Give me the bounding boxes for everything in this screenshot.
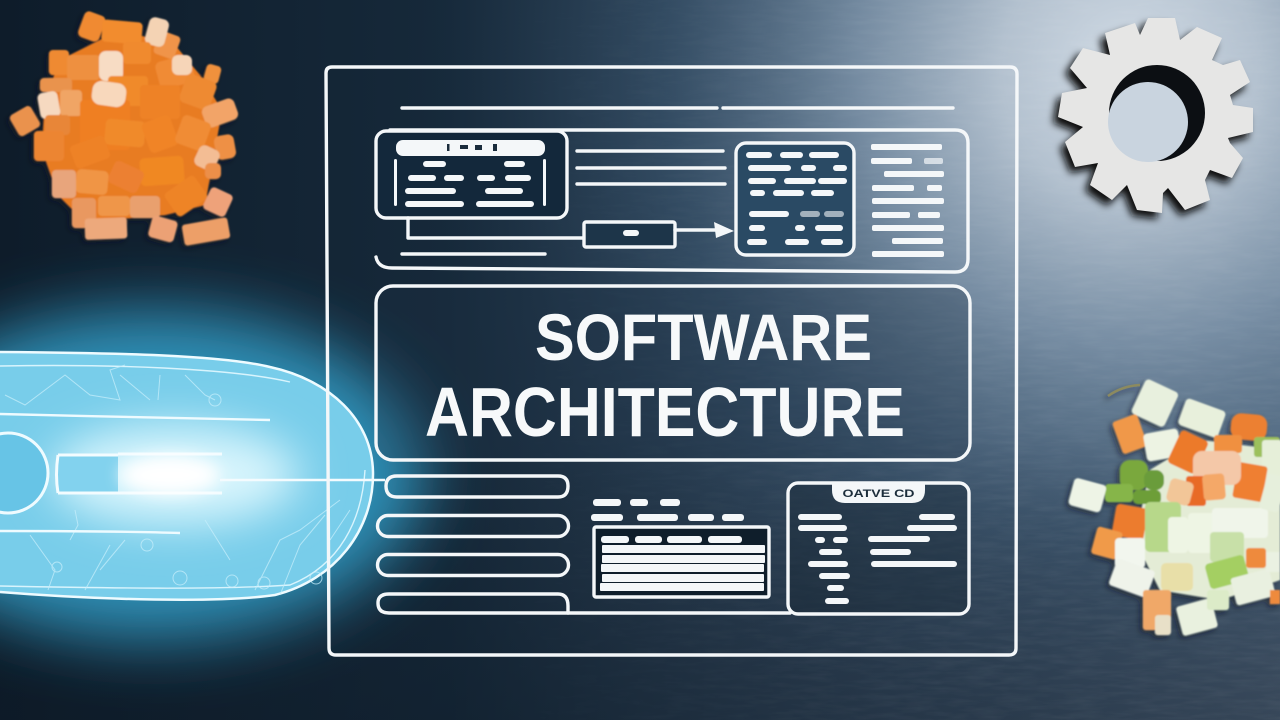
connector from mouse to list <box>220 479 385 481</box>
panel: title box <box>376 286 970 460</box>
panel: top diagram <box>376 130 968 272</box>
title line two: ARCHITECTURE <box>425 373 905 451</box>
connector with box and arrow <box>408 218 734 247</box>
sub-panel: data table <box>736 143 854 255</box>
panel: output box <box>788 483 969 614</box>
outer frame <box>326 67 1017 655</box>
header lines <box>402 106 953 110</box>
mixed vegetables pile <box>1068 378 1280 636</box>
mouse scroll lines <box>0 414 270 533</box>
carrots pile <box>9 10 240 246</box>
tab label <box>832 483 925 503</box>
panel: bottom pill list <box>378 476 568 613</box>
right text column <box>871 144 944 257</box>
mouse slot <box>56 454 222 495</box>
circuit traces on mouse <box>5 365 350 595</box>
sub-panel: window <box>376 131 567 218</box>
background: slate surface <box>282 0 1280 720</box>
tab label: OATVE CD <box>842 488 915 500</box>
text lines <box>577 151 725 184</box>
mouse wheel circle <box>0 433 48 513</box>
glow around mouse <box>0 310 425 640</box>
icon: metal gear <box>1053 18 1253 219</box>
output text bars <box>798 514 957 604</box>
table block <box>591 499 769 597</box>
vegetable stalk <box>1108 385 1140 396</box>
baseline link <box>568 611 790 615</box>
footer line <box>402 252 545 256</box>
broccoli <box>1105 460 1164 504</box>
title: SOFTWARE <box>535 300 872 374</box>
icon: glowing mouse <box>0 352 385 600</box>
